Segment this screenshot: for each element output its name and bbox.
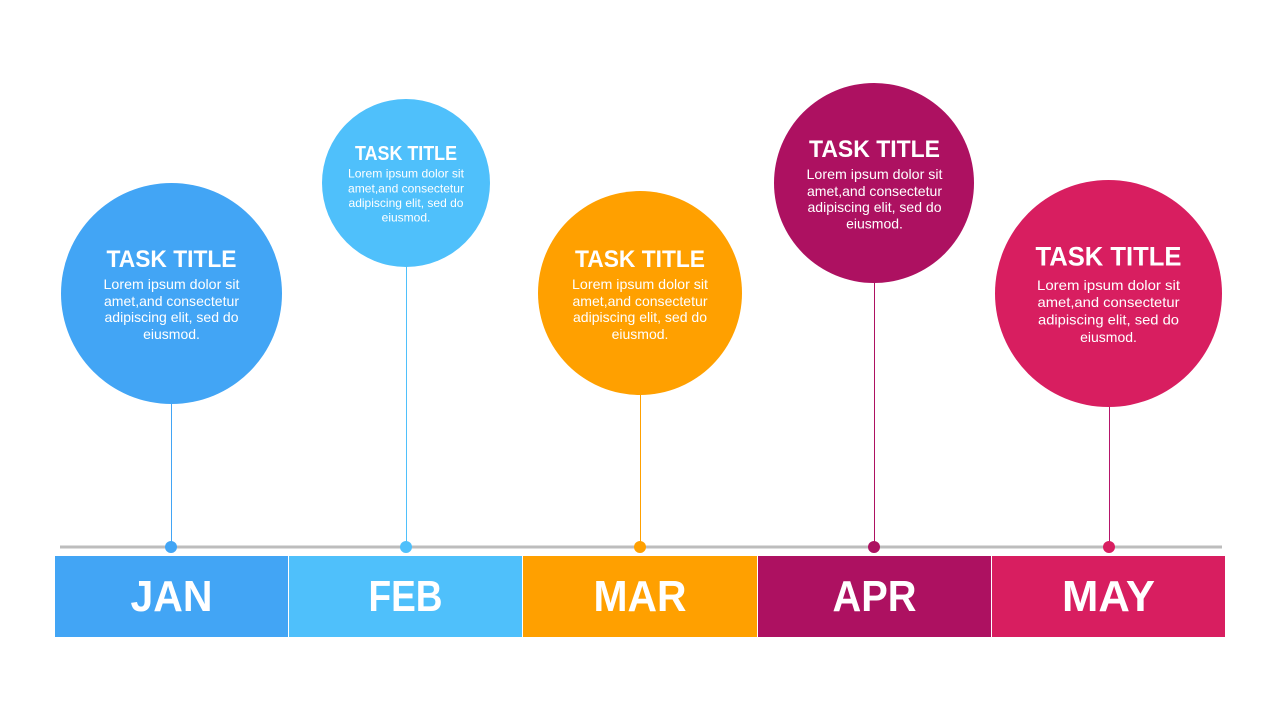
month band: February: FEB [368,572,442,621]
month band: January: JAN [130,572,212,621]
month band: March [523,556,757,637]
bubble: February task: amet,and consectetur [348,182,464,196]
bubble: April task: adipiscing elit, sed do [808,199,942,215]
bubble: February task: adipiscing elit, sed do [348,196,464,210]
connector: January [171,400,172,547]
bubble: April task [774,83,974,283]
connector: April [874,278,875,547]
bubble: April task: amet,and consectetur [807,183,942,199]
bubble: May task: Lorem ipsum dolor sit [1037,277,1180,293]
marker dot: March [634,541,646,553]
bubble: May task: TASK TITLE [1036,242,1182,272]
bubble: February task [322,99,490,267]
marker dot: January [165,541,177,553]
marker dot: February [400,541,412,553]
bubble: May task: eiusmod. [1080,329,1137,345]
bubble: January task: eiusmod. [143,326,200,342]
milestone: January [61,183,282,553]
connector: February [406,262,407,547]
timeline axis [60,546,1222,548]
bubble: January task [61,183,282,404]
bubble: February task: TASK TITLE [355,143,457,165]
bubble: January task: adipiscing elit, sed do [104,309,239,325]
marker dot: May [1103,541,1115,553]
bubble: May task: amet,and consectetur [1038,294,1180,310]
connector: May [1109,400,1110,547]
connector: March [640,390,641,547]
bubble: January task: Lorem ipsum dolor sit [104,276,240,292]
month band: April: APR [832,572,916,621]
bubble: March task [538,191,742,395]
milestone: March [538,191,742,553]
milestone: April [774,83,974,553]
milestone: February [322,99,490,553]
bubble: February task: eiusmod. [382,210,430,224]
month band: March: MAR [594,572,686,621]
month band: April [758,556,991,637]
bubble: April task: Lorem ipsum dolor sit [806,166,943,182]
bubble: March task: eiusmod. [612,326,668,342]
bubble: February task: Lorem ipsum dolor sit [348,166,465,180]
month band: May [992,556,1225,637]
milestone: May [995,180,1222,553]
bubble: April task: eiusmod. [846,216,903,232]
bubble: March task: amet,and consectetur [572,293,708,309]
bubble: January task: amet,and consectetur [104,293,239,309]
month band: May: MAY [1062,572,1155,621]
bubble: March task: adipiscing elit, sed do [573,309,707,325]
month band: February [289,556,522,637]
bubble: May task: adipiscing elit, sed do [1038,312,1179,328]
bubble: March task: Lorem ipsum dolor sit [572,276,708,292]
bubble: March task: TASK TITLE [575,246,705,273]
bubble: April task: TASK TITLE [809,136,940,163]
bubble: January task: TASK TITLE [106,246,236,273]
marker dot: April [868,541,880,553]
month band: January [55,556,288,637]
bubble: May task [995,180,1222,407]
